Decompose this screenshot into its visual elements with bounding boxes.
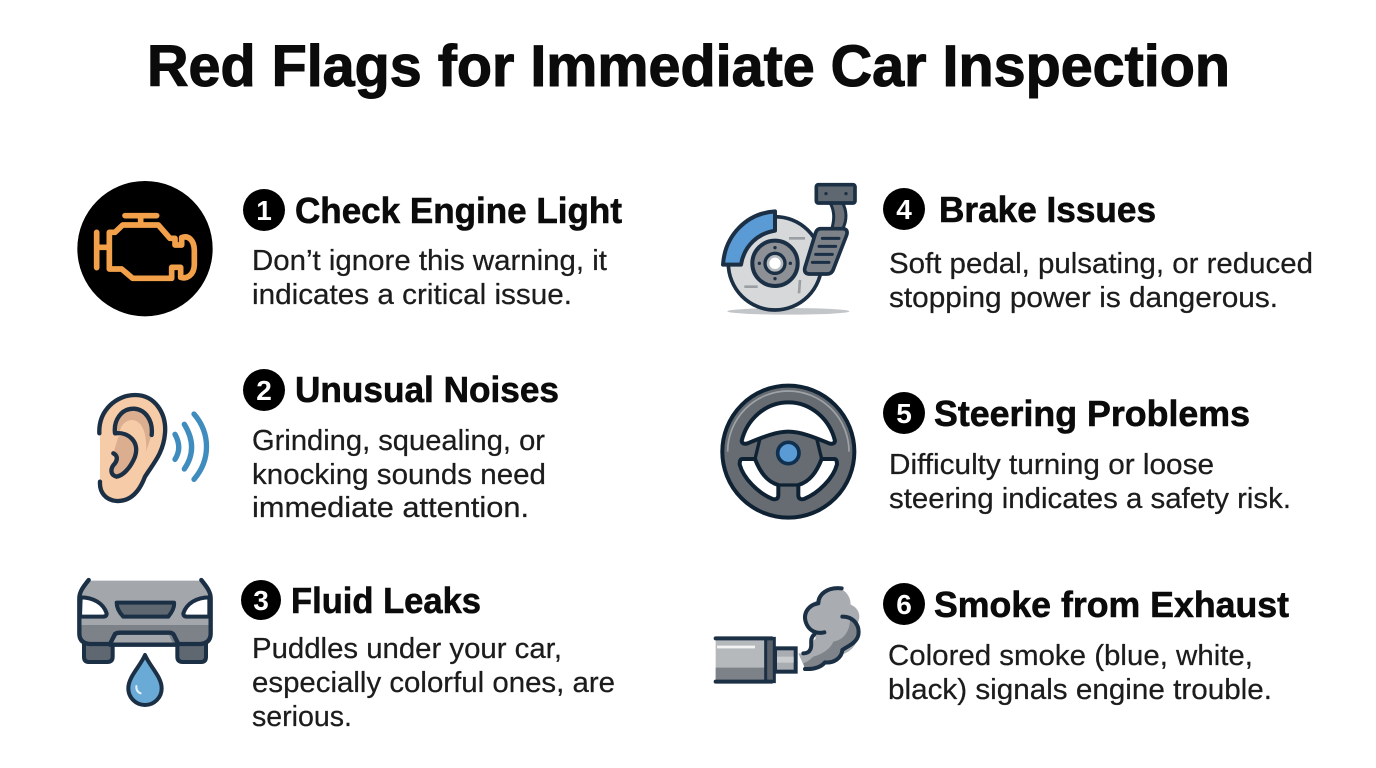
panel: check engine light bbox=[77, 181, 622, 316]
description bbox=[252, 633, 615, 733]
description: Don’t ignore this warning, it bbox=[252, 245, 607, 277]
panel: brake issues bbox=[723, 185, 1313, 315]
number badge 2: 2 bbox=[256, 375, 272, 406]
number badge 4 bbox=[883, 188, 925, 230]
icon: car with fluid drop bbox=[79, 580, 211, 705]
icon: steering wheel bbox=[722, 386, 854, 518]
description: Grinding, squealing, or bbox=[252, 425, 545, 457]
number badge 3: 3 bbox=[253, 585, 269, 616]
panel: fluid leaks bbox=[79, 580, 615, 733]
icon: exhaust pipe with smoke bbox=[716, 587, 859, 682]
description bbox=[889, 449, 1291, 515]
description: Difficulty turning or loose bbox=[889, 449, 1214, 481]
icon: ear with sound waves bbox=[99, 395, 206, 501]
description: steering indicates a safety risk. bbox=[889, 483, 1291, 515]
description: Soft pedal, pulsating, or reduced bbox=[889, 248, 1313, 280]
description: knocking sounds need bbox=[252, 459, 546, 491]
number badge 5 bbox=[883, 392, 925, 434]
description: indicates a critical issue. bbox=[252, 279, 572, 311]
panel: steering problems bbox=[722, 386, 1291, 518]
title: Red Flags for Immediate Car Inspection bbox=[147, 34, 1230, 99]
icon: check engine light bbox=[77, 181, 213, 316]
heading: Smoke from Exhaust bbox=[934, 584, 1289, 625]
icon: brake disc and pedal bbox=[723, 185, 855, 315]
description: stopping power is dangerous. bbox=[889, 282, 1278, 314]
heading: Brake Issues bbox=[939, 189, 1156, 230]
description: black) signals engine trouble. bbox=[888, 674, 1272, 706]
description: Puddles under your car, bbox=[252, 633, 562, 665]
number badge 5: 5 bbox=[896, 398, 912, 429]
number badge 1: 1 bbox=[256, 195, 272, 226]
description bbox=[252, 245, 607, 311]
description bbox=[252, 425, 546, 524]
description: especially colorful ones, are bbox=[252, 667, 615, 699]
panel: unusual noises bbox=[99, 369, 559, 524]
description: serious. bbox=[252, 701, 352, 733]
number badge 6: 6 bbox=[896, 589, 912, 620]
panel: smoke from exhaust bbox=[716, 583, 1289, 706]
heading: Steering Problems bbox=[934, 393, 1250, 434]
heading: Unusual Noises bbox=[295, 369, 559, 410]
number badge 4: 4 bbox=[896, 194, 912, 225]
description: immediate attention. bbox=[252, 492, 529, 524]
number badge 3 bbox=[241, 580, 281, 620]
number badge 6 bbox=[883, 583, 925, 625]
heading: Check Engine Light bbox=[295, 190, 622, 231]
description: Colored smoke (blue, white, bbox=[888, 640, 1253, 672]
description bbox=[889, 248, 1313, 314]
heading: Fluid Leaks bbox=[291, 580, 481, 621]
number badge 1 bbox=[243, 189, 285, 231]
description bbox=[888, 640, 1272, 706]
number badge 2 bbox=[243, 369, 285, 411]
